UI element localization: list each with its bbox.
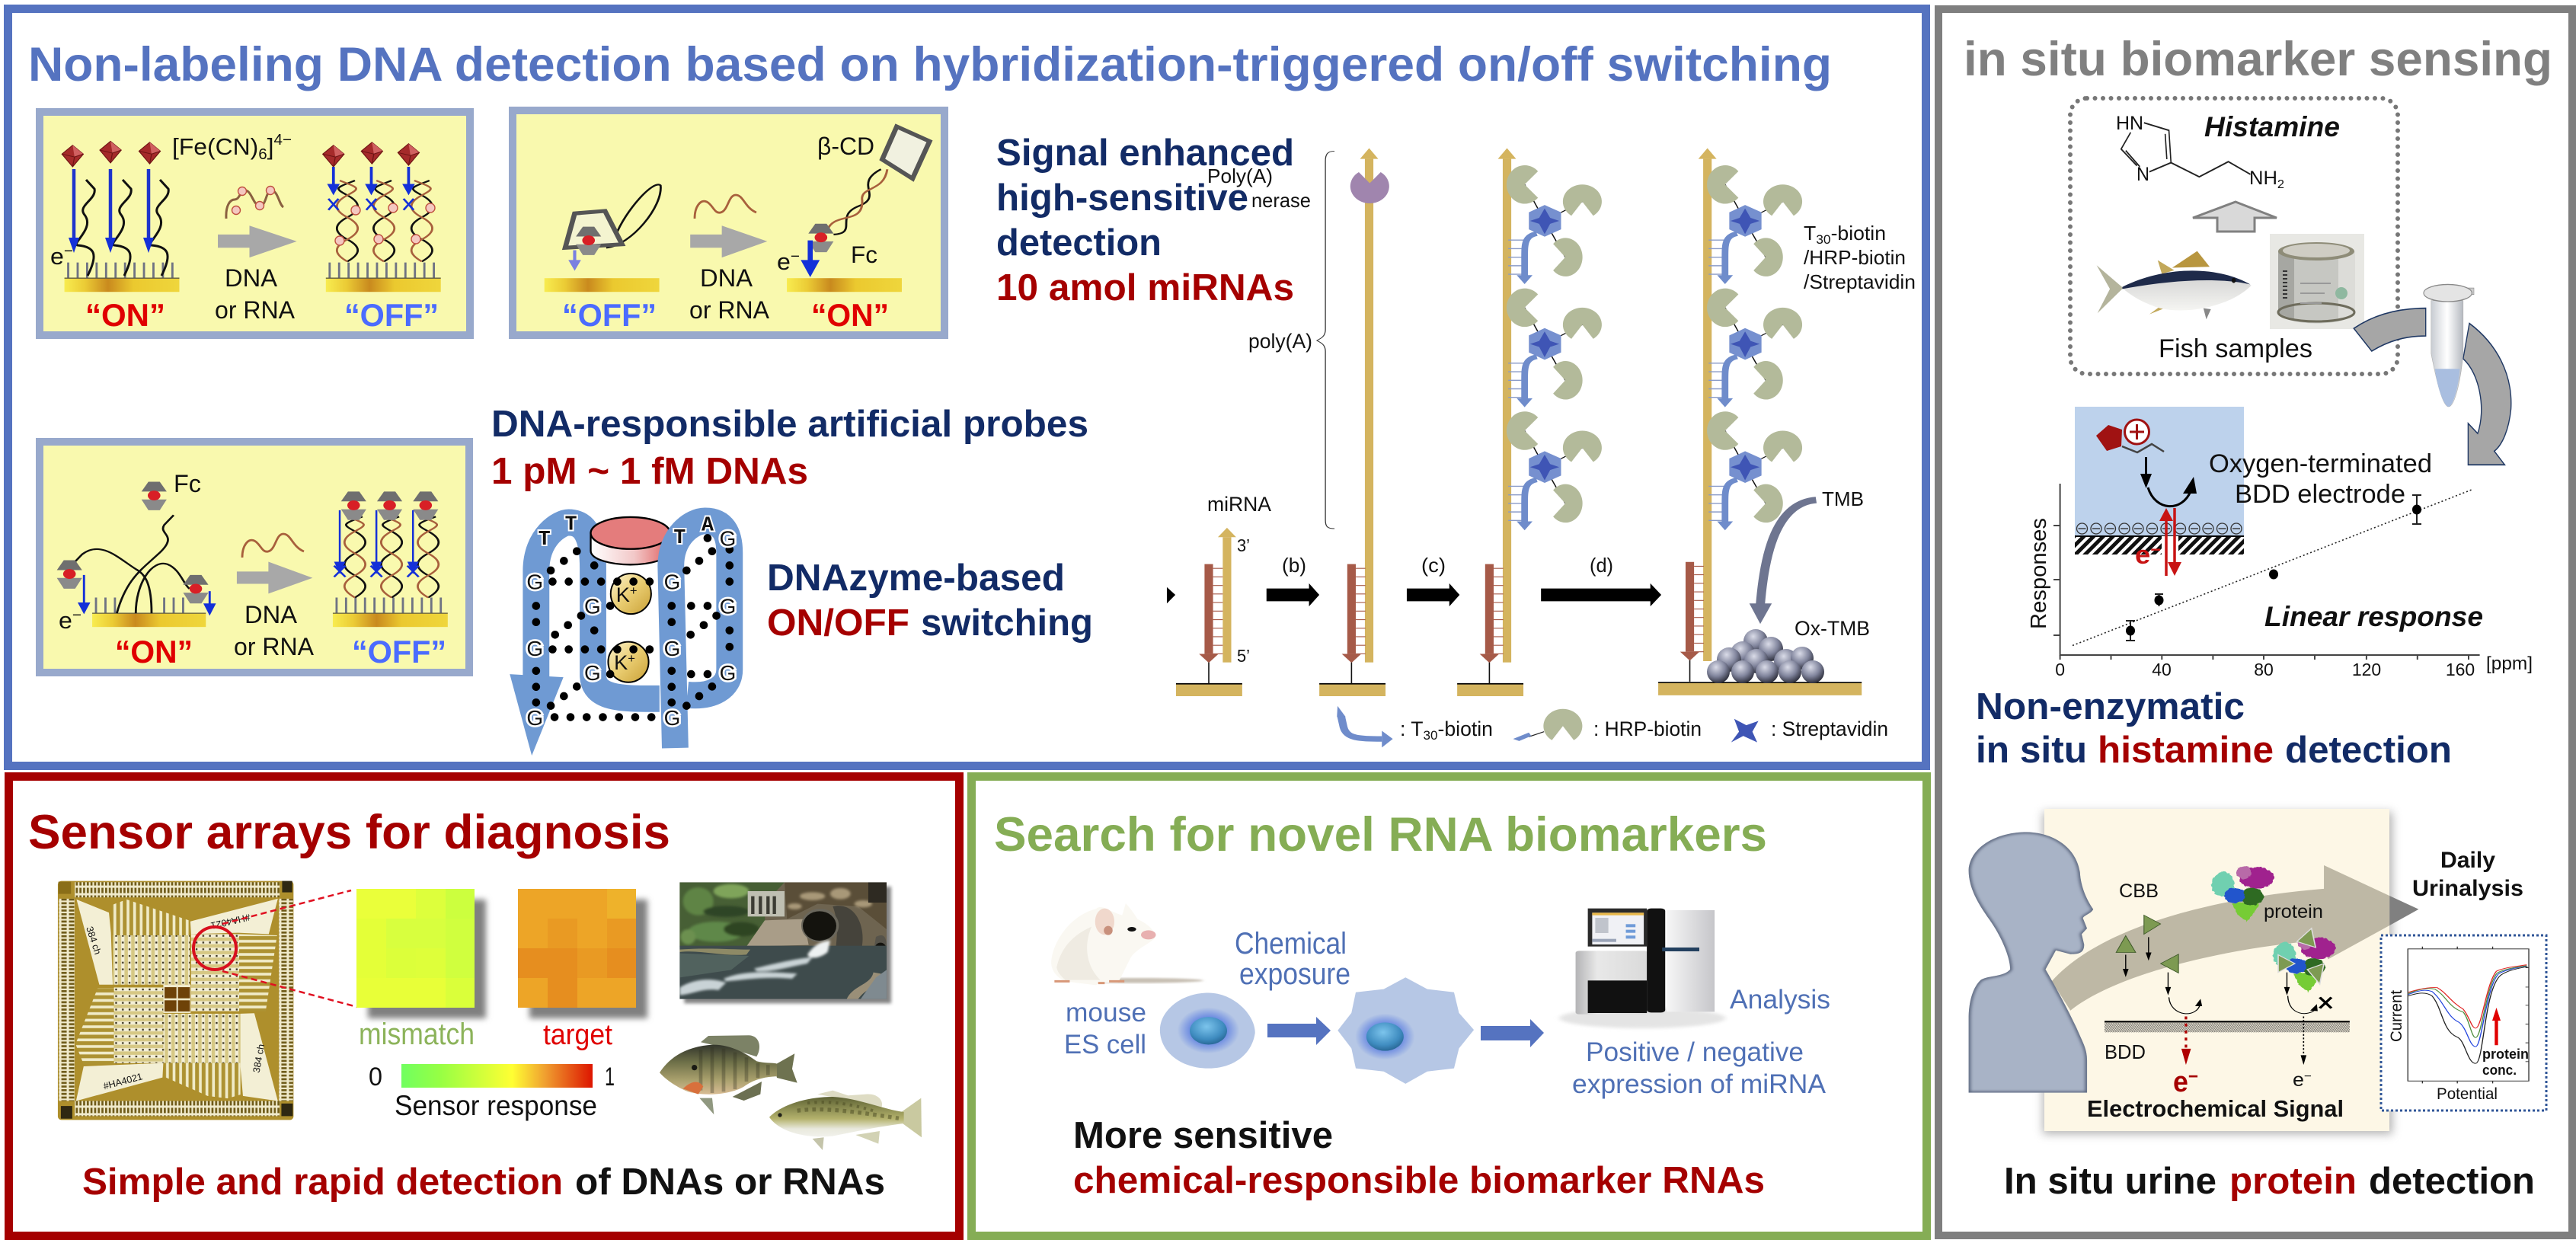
label: daily urinalysis: Daily [2440, 848, 2495, 873]
step b: poly(A) extension [1319, 149, 1389, 696]
diagram: ferrocyanide on/off probe box: or RNA [215, 296, 295, 324]
chart: current versus potential: Current [2388, 990, 2405, 1042]
heading: DNA-responsible artificial probes: 1 pM ~ 1 fM DNAs [491, 450, 808, 492]
diagram: ferrocyanide on/off probe box: “ON” [85, 297, 165, 333]
diagram: G-quadruplex DNAzyme: G [526, 637, 543, 660]
caption: non-enzymatic histamine detection: in situ [1976, 729, 2087, 771]
title: sensor arrays: Sensor arrays for diagnosis [28, 806, 670, 859]
text: positive negative expression [1572, 1037, 1826, 1099]
chart: histamine linear response: [ppm] [2486, 654, 2533, 674]
step d: TMB oxidation [1658, 149, 1862, 695]
heading: signal enhanced high-sensitive detection: high-sensitive [996, 177, 1248, 219]
icon: ES cell [1160, 993, 1255, 1069]
diagram: G-quadruplex DNAzyme: G [664, 706, 680, 730]
caption: simple and rapid detection [82, 1161, 885, 1203]
diagram: urine protein sensing: − [2304, 1070, 2312, 1083]
icon: sample tube with transfer arrow [2354, 284, 2511, 465]
arrow: urinalysis flow [2052, 865, 2418, 1011]
caption: in situ urine protein detection [2004, 1160, 2535, 1202]
heading: DNAzyme-based ON/OFF switching: switching [921, 602, 1093, 644]
diagram: ferrocene tethered probe box: “OFF” [352, 634, 446, 670]
diagram: poly(A) signal amplification steps: miRNA [1207, 493, 1271, 516]
chart: histamine linear response: Linear response [2264, 601, 2483, 632]
diagram: G-quadruplex DNAzyme: + [630, 583, 638, 598]
heading: DNAzyme-based ON/OFF switching [767, 557, 1093, 644]
electrode [2105, 1023, 2350, 1032]
diagram: ferrocene tethered probe box: or RNA [234, 633, 314, 660]
text: positive negative expression: Positive / negative [1586, 1037, 1804, 1067]
diagram: ferrocene tethered probe box: e [59, 607, 72, 634]
icon: person silhouette [1969, 832, 2093, 1093]
image: sensor chip: #HA4021 [209, 912, 251, 931]
diagram: poly(A) signal amplification steps: 30 [1816, 232, 1831, 247]
diagram: BDD electrode mechanism: e [2135, 541, 2149, 570]
text: chemical exposure: exposure [1239, 957, 1350, 991]
panel: in situ biomarker sensing [1938, 9, 2572, 1235]
heat map: mismatch [356, 889, 486, 1018]
diagram: poly(A) signal amplification steps: -biotin [1831, 222, 1886, 244]
chart: histamine linear response [2027, 484, 2533, 679]
colour bar: sensor response: Sensor response [395, 1089, 597, 1121]
diagram: G-quadruplex DNAzyme: A [702, 514, 714, 537]
legend: T30-biotin, HRP-biotin, streptavidin [1337, 706, 1888, 747]
legend: T30-biotin, HRP-biotin, streptavidin: : T [1400, 717, 1423, 740]
image: sensor chip: 384 ch [251, 1043, 267, 1073]
label: daily urinalysis [2412, 848, 2523, 901]
diagram: poly(A) signal amplification steps: /Streptavidin [1804, 270, 1916, 293]
diagram: urine protein sensing: e [2293, 1069, 2303, 1091]
step a: miRNA capture [1176, 528, 1242, 696]
chemical structure: histamine: Histamine [2204, 111, 2340, 142]
diagram: beta-cyclodextrin off/on probe box [513, 110, 944, 335]
caption: in situ urine protein detection: detection [2369, 1160, 2535, 1202]
diagram: G-quadruplex DNAzyme: G [720, 594, 736, 618]
diagram: poly(A) signal amplification steps: /HRP-biotin [1804, 246, 1906, 269]
diagram: poly(A) signal amplification steps: (b) [1282, 554, 1306, 577]
caption: simple and rapid detection: of DNAs or RNAs [575, 1161, 885, 1203]
legend: T30-biotin, HRP-biotin, streptavidin: : Streptavidin [1771, 717, 1888, 740]
legend: T30-biotin, HRP-biotin, streptavidin: -biotin [1438, 717, 1493, 740]
text: analysis: Analysis [1730, 984, 1830, 1015]
title: in situ biomarker sensing: in situ biomarker sensing [1964, 33, 2552, 86]
image: tuna [2097, 251, 2252, 319]
text: mouse ES cell [1064, 997, 1146, 1059]
heading: DNAzyme-based ON/OFF switching: ON/OFF [767, 602, 909, 644]
chart: histamine linear response: 40 [2152, 660, 2172, 679]
diagram: G-quadruplex DNAzyme: G [526, 706, 543, 730]
diagram: G-quadruplex DNAzyme: G [720, 526, 736, 550]
diagram: urine protein sensing: Electrochemical Signal [2087, 1096, 2344, 1122]
diagram: BDD electrode mechanism: BDD electrode [2235, 480, 2405, 509]
heading: signal enhanced high-sensitive detection [996, 132, 1294, 308]
chart: current versus potential: conc. [2482, 1063, 2517, 1078]
panel: novel RNA biomarkers [972, 777, 1927, 1235]
diagram: BDD electrode mechanism: Oxygen-terminated [2209, 449, 2432, 478]
diagram: poly(A) signal amplification steps: (c) [1421, 554, 1446, 577]
diagram: beta-cyclodextrin off/on probe box: “OFF” [562, 297, 657, 333]
chemical structure: histamine: NH [2249, 168, 2277, 189]
chemical structure: histamine: HN [2116, 113, 2143, 134]
colour bar: sensor response: 1 [605, 1063, 615, 1091]
diagram: urine protein sensing: − [2188, 1066, 2198, 1087]
diagram: poly(A) signal amplification steps: (d) [1590, 554, 1613, 577]
chemical structure: histamine [2116, 111, 2340, 191]
image: sensor chip: #HA4021 [102, 1071, 144, 1091]
image: sunfish and bass [660, 1035, 922, 1150]
diagram: poly(A) signal amplification steps: TMB [1822, 487, 1864, 510]
image: sensor chip [58, 881, 357, 1120]
chart: current versus potential [2381, 935, 2546, 1111]
label: mismatch: mismatch [359, 1018, 475, 1051]
diagram: beta-cyclodextrin off/on probe box: Fc [851, 241, 877, 268]
diagram: beta-cyclodextrin off/on probe box: “ON” [811, 297, 889, 333]
text: mouse ES cell: mouse [1066, 997, 1146, 1027]
diagram: urine protein sensing: e [2173, 1066, 2189, 1098]
heading: DNA-responsible artificial probes [491, 403, 1088, 492]
diagram: G-quadruplex DNAzyme: K [616, 583, 630, 606]
diagram: G-quadruplex DNAzyme: G [664, 637, 680, 660]
diagram: G-quadruplex DNAzyme: G [720, 661, 736, 685]
diagram: ferrocyanide on/off probe box: DNA [225, 264, 277, 292]
diagram: G-quadruplex DNAzyme: T [673, 526, 686, 549]
arrow: step c [1407, 583, 1459, 606]
caption: simple and rapid detection: Simple and rapid detection [82, 1161, 563, 1203]
diagram: urine protein sensing: BDD [2105, 1042, 2146, 1063]
title: non-labeling DNA detection: Non-labeling DNA detection based on hybridization-triggered on/off switching [28, 38, 1832, 91]
text: mouse ES cell: ES cell [1064, 1029, 1146, 1059]
colour bar: sensor response [369, 1063, 615, 1121]
diagram: poly(A) signal amplification steps: Poly(A) [1207, 165, 1273, 187]
diagram: poly(A) signal amplification steps: 5’ [1237, 646, 1250, 666]
diagram: poly(A) signal amplification steps: nerase [1251, 189, 1311, 212]
caption: non-enzymatic histamine detection: Non-enzymatic [1976, 686, 2245, 727]
caption: more sensitive biomarker RNAs: More sensitive [1073, 1114, 1333, 1156]
diagram: ferrocene tethered probe box: “ON” [115, 634, 193, 670]
diagram: ferrocyanide on/off probe box: 6 [258, 146, 267, 163]
diagram: beta-cyclodextrin off/on probe box: DNA [700, 264, 753, 292]
chemical structure: histamine: N [2137, 164, 2149, 185]
diagram: G-quadruplex DNAzyme: G [584, 594, 601, 618]
diagram: poly(A) signal amplification steps: 3’ [1237, 535, 1250, 555]
text: chemical exposure [1235, 927, 1350, 991]
chart: histamine linear response: Responses [2027, 518, 2051, 629]
label: fish samples: Fish samples [2159, 334, 2312, 363]
diagram: ferrocyanide on/off probe box: [Fe(CN) [172, 133, 256, 160]
panel: non-labeling DNA detection [8, 9, 1926, 766]
heading: DNAzyme-based ON/OFF switching: DNAzyme-based [767, 557, 1065, 599]
chemical structure: histamine: 2 [2277, 178, 2284, 191]
diagram: beta-cyclodextrin off/on probe box: e [777, 248, 790, 275]
diagram: ferrocyanide on/off probe box: 4− [274, 132, 292, 149]
icon: sequencer [1559, 909, 1725, 1028]
diagram: G-quadruplex DNAzyme [510, 513, 736, 756]
text: positive negative expression: expression of miRNA [1572, 1069, 1826, 1099]
diagram: BDD electrode mechanism [2075, 407, 2432, 576]
diagram: poly(A) signal amplification steps [1167, 149, 1916, 696]
icon: mouse [1051, 903, 1203, 985]
heading: signal enhanced high-sensitive detection: detection [996, 222, 1162, 264]
diagram: urine protein sensing: CBB [2119, 880, 2159, 902]
group: histamine fish samples [2070, 98, 2398, 374]
caption: in situ urine protein detection: protein [2229, 1160, 2357, 1202]
diagram: ferrocene tethered probe box: DNA [244, 601, 297, 628]
heading: signal enhanced high-sensitive detection: 10 amol miRNAs [996, 267, 1294, 308]
diagram: ferrocene tethered probe box [40, 442, 469, 673]
caption: more sensitive biomarker RNAs: chemical-responsible biomarker RNAs [1073, 1159, 1765, 1201]
diagram: BDD electrode mechanism: − [2150, 540, 2161, 559]
label: daily urinalysis: Urinalysis [2412, 876, 2523, 901]
diagram: urine protein sensing: protein [2264, 901, 2323, 922]
diagram: G-quadruplex DNAzyme: T [539, 528, 551, 551]
chart: current versus potential: Potential [2437, 1085, 2498, 1103]
arrow: up [2193, 202, 2277, 232]
diagram: G-quadruplex DNAzyme: + [628, 651, 635, 666]
caption: non-enzymatic histamine detection: detection [2285, 729, 2452, 771]
icon: exposed cell [1338, 977, 1474, 1084]
chart: current versus potential: protein [2482, 1047, 2529, 1062]
chart: histamine linear response: 0 [2055, 660, 2065, 679]
diagram: ferrocyanide on/off probe box: ] [267, 133, 274, 160]
heat map: target [518, 889, 647, 1018]
heading: DNA-responsible artificial probes: DNA-responsible artificial probes [491, 403, 1088, 445]
heading: signal enhanced high-sensitive detection: Signal enhanced [996, 132, 1294, 174]
caption: non-enzymatic histamine detection [1976, 686, 2452, 771]
image: tuna can [2270, 234, 2364, 329]
diagram: beta-cyclodextrin off/on probe box: β-CD [817, 133, 874, 160]
image: sensor chip: 384 ch [84, 925, 103, 956]
legend: T30-biotin, HRP-biotin, streptavidin: 30 [1424, 728, 1438, 743]
legend: T30-biotin, HRP-biotin, streptavidin: : HRP-biotin [1593, 717, 1702, 740]
diagram: beta-cyclodextrin off/on probe box: − [791, 248, 800, 265]
diagram: poly(A) signal amplification steps: T [1804, 222, 1816, 244]
arrow: exposed cell to analysis [1481, 1019, 1544, 1047]
arrow: step d [1541, 583, 1661, 606]
diagram: ferrocyanide on/off probe box: − [64, 243, 73, 260]
diagram: G-quadruplex DNAzyme: G [584, 661, 601, 685]
diagram: ferrocene tethered probe box: − [72, 607, 81, 624]
arrow: cell to exposed cell [1267, 1017, 1331, 1045]
chart: histamine linear response: 120 [2352, 660, 2381, 679]
diagram: ferrocyanide on/off probe box: e [50, 243, 63, 270]
diagram: ferrocyanide on/off probe box [40, 112, 470, 335]
panel: sensor arrays for diagnosis [9, 777, 960, 1235]
diagram: beta-cyclodextrin off/on probe box: or RNA [689, 296, 769, 324]
diagram: G-quadruplex DNAzyme: G [526, 570, 543, 594]
chart: histamine linear response: 80 [2254, 660, 2274, 679]
caption: in situ urine protein detection: In situ urine [2004, 1160, 2216, 1202]
diagram: ferrocyanide on/off probe box: “OFF” [344, 297, 439, 333]
diagram: poly(A) signal amplification steps: Ox-TMB [1795, 617, 1870, 640]
diagram: urine protein sensing [1969, 809, 2418, 1134]
diagram: G-quadruplex DNAzyme: G [664, 570, 680, 594]
diagram: G-quadruplex DNAzyme: T [565, 513, 577, 536]
diagram: ferrocene tethered probe box: Fc [174, 470, 201, 497]
diagram: G-quadruplex DNAzyme: K [614, 650, 628, 674]
step c: T30 and HRP assembly [1457, 149, 1602, 696]
caption: more sensitive biomarker RNAs [1073, 1114, 1765, 1201]
colour bar: sensor response: 0 [369, 1063, 382, 1091]
text: chemical exposure: Chemical [1235, 927, 1347, 960]
diagram: poly(A) signal amplification steps: poly(A) [1248, 330, 1312, 353]
title: search for novel RNA biomarkers: Search for novel RNA biomarkers [994, 808, 1767, 861]
caption: non-enzymatic histamine detection: histamine [2098, 729, 2274, 771]
arrow: step b [1267, 583, 1319, 606]
label: target: target [543, 1019, 612, 1051]
chart: histamine linear response: 160 [2446, 660, 2475, 679]
image: polluted water outfall [679, 882, 891, 1003]
